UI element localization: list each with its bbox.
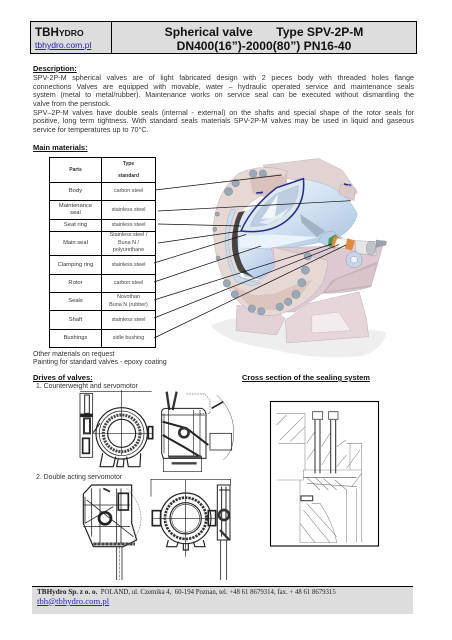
title: DN400(16”)-2000(80”) PN16-40 — [177, 38, 351, 52]
materials table: stainless steel — [112, 222, 145, 228]
main materials heading: Main materials: — [33, 143, 88, 152]
description text — [33, 73, 414, 134]
materials table: stainless steel — [112, 206, 145, 212]
header divider — [111, 22, 112, 53]
materials table: stainless steel — [112, 262, 145, 268]
materials table: standard — [118, 173, 139, 179]
materials table: Parts — [69, 167, 82, 173]
cross section heading: Cross section of the sealing system — [242, 373, 370, 382]
materials table: Stainless steel / — [110, 232, 147, 238]
drawing: double acting side view — [83, 485, 141, 580]
materials table: Novothan — [117, 294, 140, 300]
brand link: tbhydro.com.pl — [35, 40, 91, 50]
materials table: Maintenance — [59, 203, 92, 209]
drive option 2 label: 2. Double acting servomotor — [36, 474, 122, 481]
drive option 1 label: 1. Counterweight and servomotor — [36, 383, 138, 390]
description text: connections Valves are equipped with movable, water – hydraulic operated service and maintenance seals — [33, 82, 414, 91]
drives heading: Drives of valves: — [33, 373, 93, 382]
materials table: carbon steel — [114, 280, 143, 286]
materials table: Bushings — [64, 335, 87, 341]
materials table: polyurethane — [113, 247, 144, 253]
materials table: Seat ring — [64, 222, 87, 228]
materials table: carbon steel — [114, 188, 143, 194]
materials table — [49, 157, 156, 348]
description text: SPV–2P-M valves have double seals (internal - external) on the shafts and special shape of the rotor seals for — [33, 108, 414, 117]
description text: valve from the penstock. — [33, 99, 111, 108]
brand name: TBHYDRO — [35, 26, 84, 39]
title — [165, 24, 363, 52]
description text: service for temperatures up to 70°C. — [33, 125, 149, 134]
description text: SPV-2P-M spherical valves are of light fabricated design with 2 pieces body with threaded holes flange — [33, 73, 414, 82]
contact email: tbh@tbhydro.com.pl — [37, 596, 109, 606]
materials table: Buna N (rubber) — [109, 302, 148, 308]
header band — [30, 21, 417, 54]
materials table: Clamping ring — [58, 262, 93, 268]
notes on materials and painting: Painting for standard valves - epoxy coating — [33, 359, 167, 366]
title: Spherical valve Type SPV-2P-M — [165, 24, 363, 38]
company address: TBHydro Sp. z o. o. POLAND, ul. Czemika 4, 60-194 Poznan, tel. +48 61 8679314, fax. + 48 61 8679315 — [37, 588, 336, 596]
materials table: stainless steel — [112, 317, 145, 323]
description text: system (metal to metal/rubber). Maintenance works on service seal can be executed without dismantling the — [33, 90, 414, 99]
materials table: Buna N / — [118, 240, 139, 246]
notes on materials and painting: Other materials on request — [33, 351, 115, 358]
materials table: Body — [69, 188, 82, 194]
materials table: Shaft — [69, 317, 82, 323]
materials table: Rotor — [68, 280, 83, 286]
materials table: Type — [123, 161, 134, 167]
drawing: counterweight front view — [80, 390, 153, 467]
notes on materials and painting — [33, 350, 167, 366]
description heading: Description: — [33, 64, 77, 73]
footer band — [32, 586, 413, 614]
materials table: seal — [70, 210, 81, 216]
drawing: double acting front view — [151, 479, 231, 580]
drawing: counterweight side view — [162, 392, 234, 472]
materials table: Seals — [68, 298, 83, 304]
description text: positive, long term tightness. With standard seals materials SPV-2P-M valves may be used in liquid and gaseous — [33, 116, 414, 125]
materials table: sidle bushing — [113, 335, 144, 341]
materials table: Main seal — [63, 240, 88, 246]
